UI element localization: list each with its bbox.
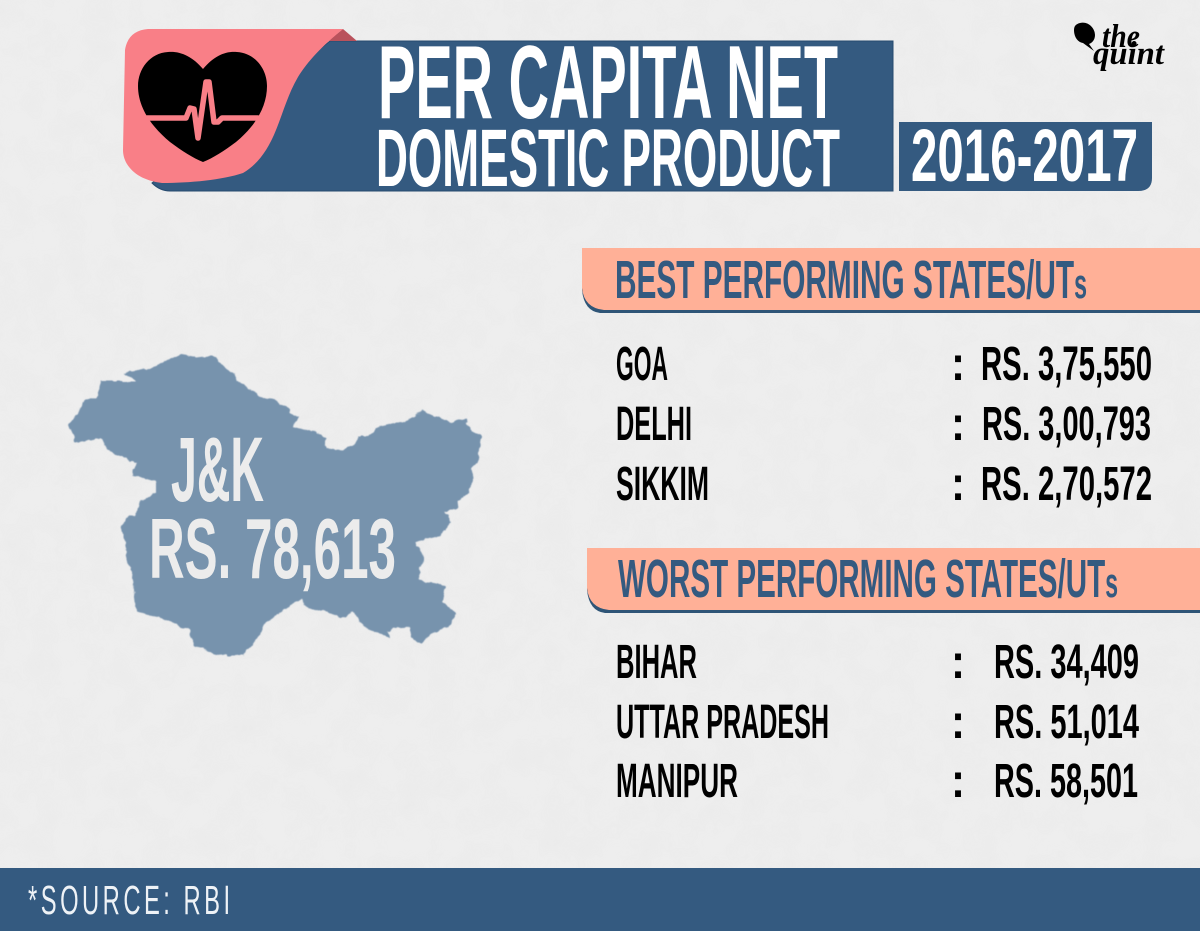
title banner bbox=[123, 25, 893, 204]
logo: the quint: quint bbox=[1093, 36, 1165, 72]
ribbon fold bbox=[328, 29, 357, 41]
row: Delhi bbox=[616, 398, 1151, 451]
map: Jammu and Kashmir bbox=[70, 355, 481, 655]
row: Goa: GOA bbox=[616, 338, 668, 391]
row: Manipur: : bbox=[951, 755, 965, 808]
row: Goa bbox=[616, 338, 1152, 391]
row: Bihar: : bbox=[951, 636, 965, 689]
row: Uttar Pradesh: UTTAR PRADESH bbox=[616, 696, 829, 749]
map label: J&K bbox=[171, 419, 264, 521]
footer: source: *SOURCE: RBI bbox=[28, 879, 234, 924]
row: Manipur bbox=[616, 755, 1138, 808]
row: Sikkim bbox=[616, 458, 1152, 511]
footer: source bbox=[0, 868, 1200, 931]
row: Sikkim: : bbox=[951, 458, 965, 511]
map value: RS. 78,613 bbox=[149, 502, 396, 597]
banner bar bbox=[152, 41, 893, 191]
icon: heart with pulse bbox=[138, 52, 267, 162]
heading band bbox=[587, 548, 1200, 613]
row: Bihar bbox=[616, 636, 1139, 689]
row: Goa: : bbox=[951, 338, 965, 391]
row: Manipur: MANIPUR bbox=[616, 755, 738, 808]
row: Bihar: BIHAR bbox=[616, 636, 697, 689]
heading band bbox=[582, 248, 1200, 313]
row: Delhi: DELHI bbox=[616, 398, 692, 451]
row: Uttar Pradesh: : bbox=[951, 696, 965, 749]
logo: the quint bbox=[1074, 19, 1165, 72]
panel: worst performing states bbox=[587, 548, 1200, 808]
panel: best performing states bbox=[582, 248, 1200, 511]
row: Delhi: : bbox=[951, 398, 965, 451]
row: Sikkim: SIKKIM bbox=[616, 458, 709, 511]
pink ribbon bbox=[123, 29, 343, 183]
logo: the quint: the bbox=[1102, 19, 1140, 55]
